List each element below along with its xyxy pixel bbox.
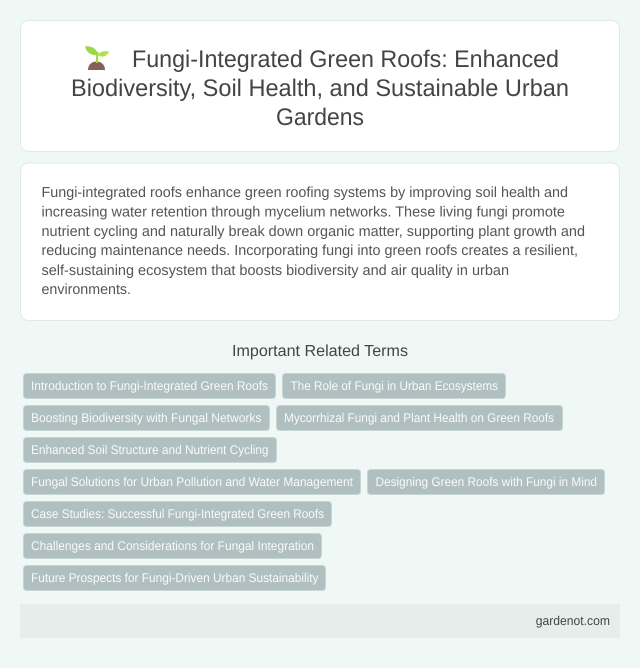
tag: role of fungi xyxy=(282,374,506,398)
tag: designing xyxy=(368,470,604,494)
heading: related terms: Important Related Terms xyxy=(232,343,408,360)
panel: description xyxy=(20,163,620,320)
tag: role of fungi: The Role of Fungi in Urban Ecosystems xyxy=(290,379,498,393)
tag: challenges: Challenges and Considerations for Fungal Integration xyxy=(31,539,314,553)
icon: seedling xyxy=(85,46,109,70)
description text: Fungi-integrated roofs enhance green roofing systems by improving soil health and xyxy=(42,185,568,201)
tag: biodiversity xyxy=(24,406,270,430)
tag: case studies: Case Studies: Successful Fungi-Integrated Green Roofs xyxy=(31,507,324,521)
tag: future prospects xyxy=(24,566,326,590)
footer source text: gardenot.com xyxy=(536,613,610,628)
footer bar xyxy=(20,604,620,638)
tag: case studies xyxy=(24,502,332,526)
tag: mycorrhizal xyxy=(276,406,562,430)
tag: pollution: Fungal Solutions for Urban Pollution and Water Management xyxy=(31,475,353,489)
tag: designing: Designing Green Roofs with Fungi in Mind xyxy=(376,475,597,489)
tag: pollution xyxy=(24,470,360,494)
description text: increasing water retention through mycelium networks. These living fungi promote xyxy=(42,204,565,220)
description text: self-sustaining ecosystem that boosts biodiversity and air quality in urban xyxy=(42,263,509,279)
tag: future prospects: Future Prospects for Fungi-Driven Urban Sustainability xyxy=(31,571,319,585)
tag: introduction: Introduction to Fungi-Integrated Green Roofs xyxy=(31,379,268,393)
tag: mycorrhizal: Mycorrhizal Fungi and Plant Health on Green Roofs xyxy=(284,411,554,425)
related terms tags xyxy=(24,374,604,590)
description text: nutrient cycling and naturally break down organic matter, supporting plant growth and xyxy=(42,224,585,240)
title line 2: Biodiversity, Soil Health, and Sustainable Urban xyxy=(71,75,569,102)
panel: title card xyxy=(20,20,620,152)
tag: soil structure xyxy=(24,438,276,462)
tag: soil structure: Enhanced Soil Structure and Nutrient Cycling xyxy=(31,443,268,457)
title line 1: Fungi-Integrated Green Roofs: Enhanced xyxy=(132,46,559,73)
tag: challenges xyxy=(24,534,322,558)
description text: reducing maintenance needs. Incorporating fungi into green roofs creates a resilient, xyxy=(42,243,578,259)
description text xyxy=(42,185,585,298)
title line 3: Gardens xyxy=(276,104,364,131)
tag: introduction xyxy=(24,374,276,398)
description text: environments. xyxy=(42,282,131,298)
tag: biodiversity: Boosting Biodiversity with Fungal Networks xyxy=(31,411,262,425)
